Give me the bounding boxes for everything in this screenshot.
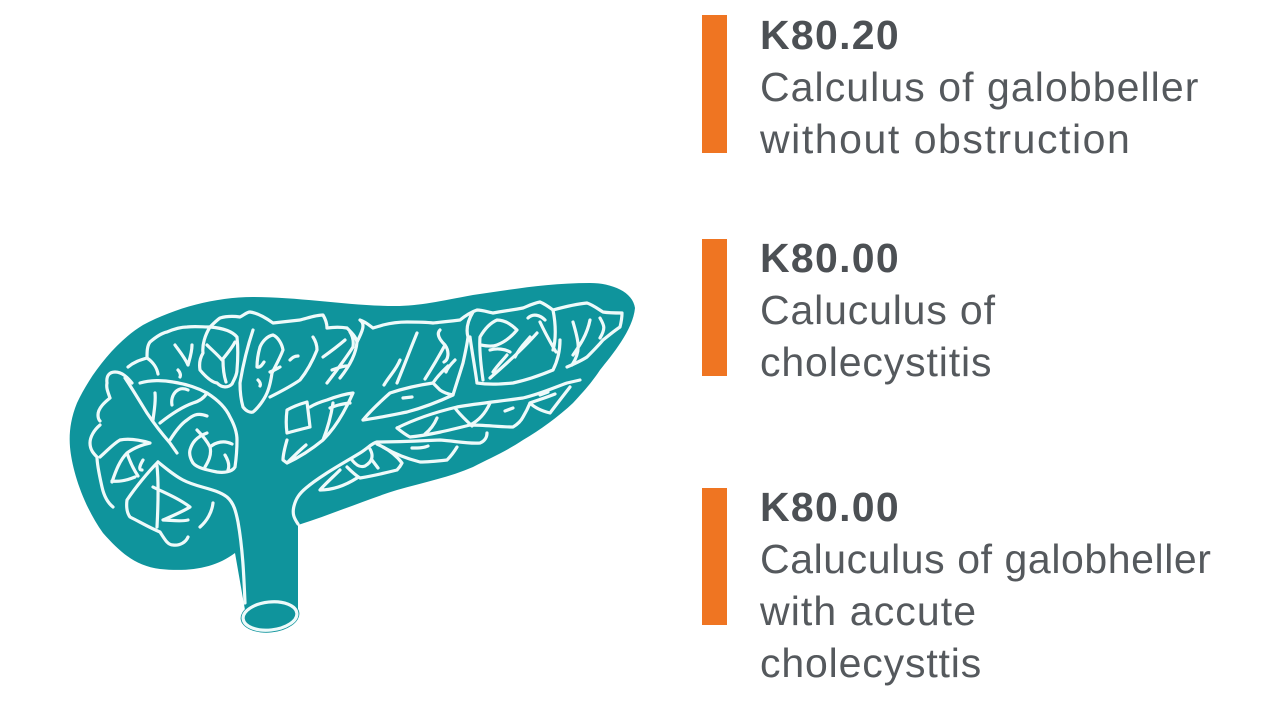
entry text: K80.20 [760, 12, 1199, 162]
entry text: K80.00 acute: Caluculus of galobheller [760, 536, 1212, 582]
centre lobules [128, 312, 357, 378]
organ silhouette [70, 283, 635, 610]
entry text: K80.00 acute: with accute [760, 588, 977, 634]
entry bar: K80.20 [702, 15, 727, 153]
duct right wall [293, 433, 487, 524]
lower right lobules [397, 380, 580, 437]
left lobules [90, 372, 132, 507]
entry text: K80.00 cholecystitis [760, 235, 996, 385]
bottom lobules [383, 446, 457, 462]
duct left wall [158, 462, 245, 603]
entry text: K80.00 cholecystitis: K80.00 [760, 235, 900, 281]
entry text: K80.20: without obstruction [760, 116, 1131, 162]
entry bar: K80.00 cholecystitis [702, 239, 727, 376]
upper right lobules [357, 302, 622, 367]
entry text: K80.00 cholecystitis: Caluculus of [760, 287, 996, 333]
entry text: K80.00 cholecystitis: cholecystitis [760, 339, 992, 385]
white vessel and lobule lines [90, 302, 622, 633]
entry text: K80.00 acute: K80.00 [760, 484, 900, 530]
entry bar: K80.00 acute [702, 488, 727, 625]
entry text: K80.20: K80.20 [760, 12, 900, 58]
square lobule [286, 402, 310, 433]
duct opening [242, 599, 298, 633]
entry text: K80.00 acute: cholecysttis [760, 640, 982, 686]
entry text: K80.20: Calculus of galobbeller [760, 64, 1199, 110]
entry text: K80.00 acute [760, 484, 1212, 686]
duct opening rim [239, 597, 301, 635]
